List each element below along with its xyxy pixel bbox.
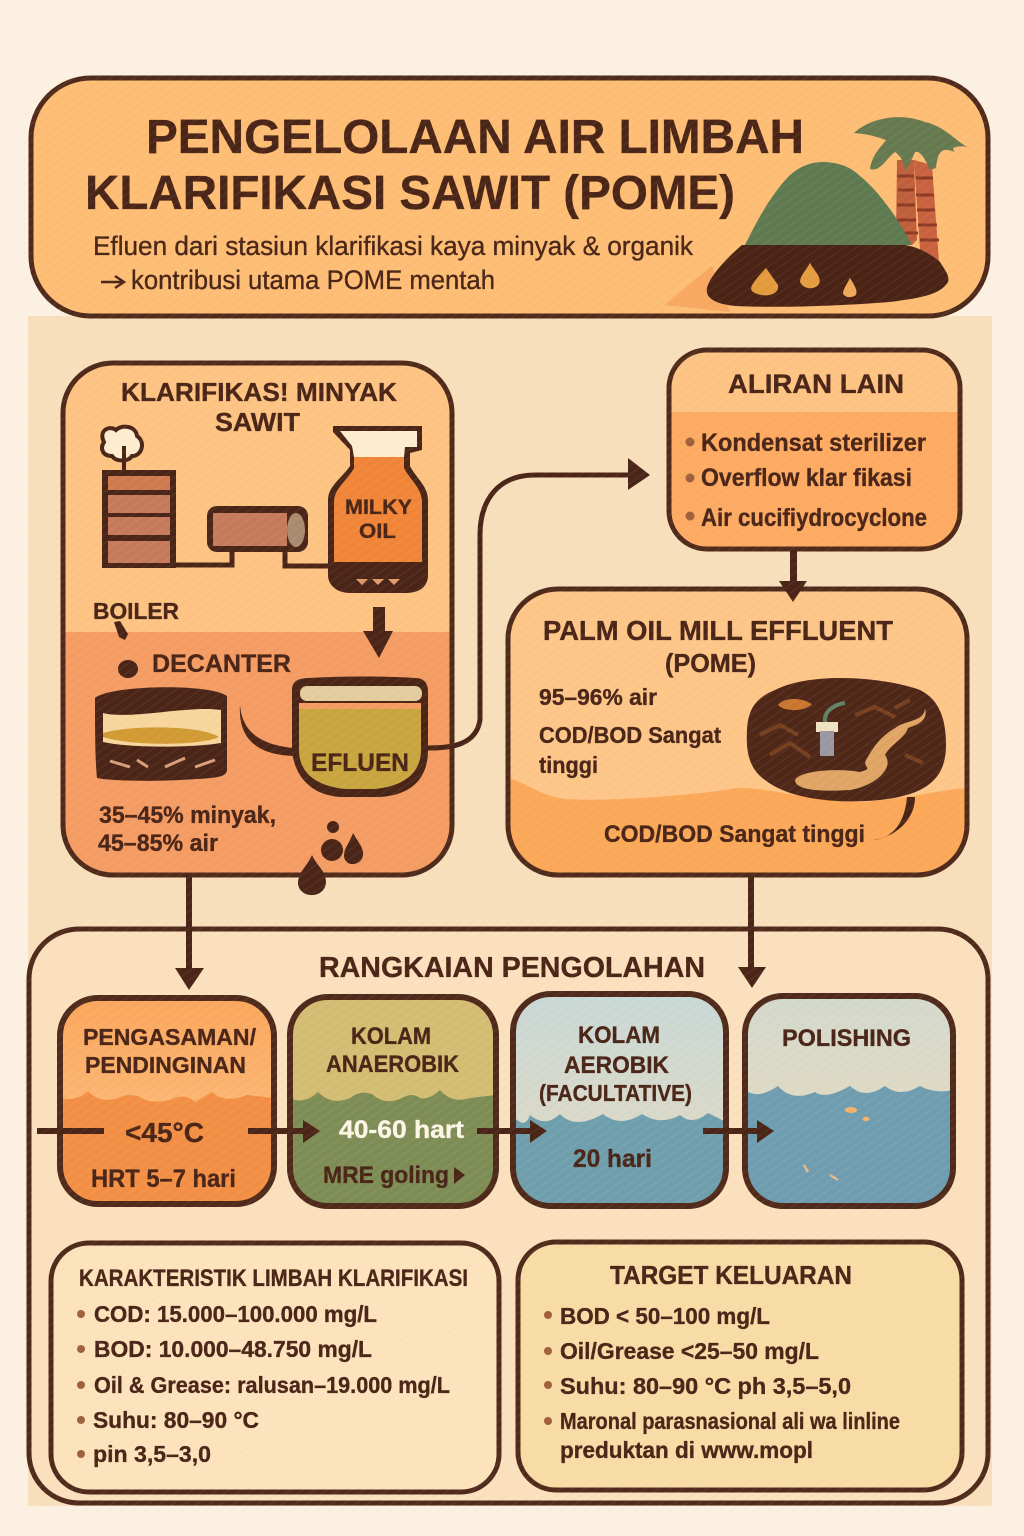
list: karakteristik: Suhu: 80–90 °C <box>93 1407 259 1433</box>
panel: header <box>31 78 988 316</box>
panel: rangkaian pengolahan <box>29 929 988 1503</box>
stage: pengasaman pendinginan <box>60 998 274 1204</box>
text: decanter composition: 35–45% minyak, <box>99 802 276 829</box>
arrow: pome to pengolahan <box>738 875 766 988</box>
text: pome properties: COD/BOD Sangat <box>539 722 721 748</box>
list: target keluaran: BOD < 50–100 mg/L <box>560 1303 770 1329</box>
heading: aliran lain: ALIRAN LAIN <box>728 369 904 399</box>
arrow: aliran lain to pome <box>779 549 807 602</box>
stage: pengasaman pendinginan: HRT 5–7 hari <box>91 1165 236 1193</box>
subtitle: kontribusi utama POME mentah <box>131 265 495 295</box>
label: boiler: BOILER <box>93 598 179 624</box>
title <box>85 111 804 220</box>
stage: pengasaman pendinginan: PENDINGINAN <box>85 1052 246 1078</box>
stage: kolam aerobik <box>513 994 726 1206</box>
text: pome properties: tinggi <box>539 752 598 778</box>
icon: pome sludge pond <box>747 678 946 840</box>
icon: boiler with pipes <box>102 427 330 568</box>
subtitle <box>93 231 693 295</box>
stage: pengasaman pendinginan: PENGASAMAN/ <box>83 1024 257 1050</box>
list: karakteristik: COD: 15.000–100.000 mg/L <box>94 1301 377 1327</box>
heading: karakteristik: KARAKTERISTIK LIMBAH KLARIFIKASI <box>79 1265 468 1292</box>
stage: kolam aerobik: KOLAM <box>578 1022 660 1049</box>
heading: pome <box>543 615 893 678</box>
heading: klarifikasi: KLARIFIKAS! MINYAK <box>121 377 397 407</box>
icon: efluen tank <box>292 676 428 797</box>
icon: milky oil bottle <box>328 426 428 593</box>
stage: kolam aerobik: 20 hari <box>573 1145 652 1173</box>
stage: kolam anaerobik: MRE goling <box>323 1162 449 1189</box>
panel: palm oil mill effluent <box>508 589 967 875</box>
list: aliran lain: Overflow klar fikasi <box>701 464 912 492</box>
stage: kolam aerobik: (FACULTATIVE) <box>539 1080 692 1106</box>
text: decanter composition: 45–85% air <box>98 830 218 857</box>
list: aliran lain <box>686 429 927 532</box>
stage: kolam anaerobik: KOLAM <box>351 1023 431 1050</box>
heading: target keluaran: TARGET KELUARAN <box>610 1260 852 1290</box>
heading: pome: PALM OIL MILL EFFLUENT <box>543 615 893 646</box>
icon: milky oil bottle: MILKY <box>345 496 412 519</box>
icon: oil droplets <box>298 821 363 895</box>
arrow: klarifikasi to pengolahan <box>175 875 204 990</box>
arrow: bottle to efluen <box>363 607 393 658</box>
list: target keluaran: Oil/Grease <25–50 mg/L <box>560 1338 819 1364</box>
icon: cylinder decanter <box>207 506 308 552</box>
title: PENGELOLAAN AIR LIMBAH <box>146 111 804 164</box>
panel: karakteristik limbah klarifikasi <box>51 1243 499 1492</box>
heading: rangkaian pengolahan: RANGKAIAN PENGOLAHAN <box>319 952 705 984</box>
stage: kolam anaerobik: ANAEROBIK <box>326 1051 460 1078</box>
heading: klarifikasi: SAWIT <box>215 407 300 437</box>
icon: palm trees, green mound and soil <box>664 117 968 312</box>
stage: pengasaman pendinginan: <45°C <box>125 1117 204 1148</box>
list: karakteristik: pin 3,5–3,0 <box>93 1441 211 1467</box>
title: KLARIFIKASI SAWIT (POME) <box>85 167 735 220</box>
arrow: stage three to four <box>703 1120 774 1143</box>
arrow: stage one to two <box>248 1120 320 1143</box>
text: decanter composition <box>98 802 276 857</box>
heading: klarifikasi <box>121 377 397 437</box>
panel: aliran lain <box>669 350 960 549</box>
stage: kolam aerobik: AEROBIK <box>564 1052 670 1079</box>
arrow: stage two to three <box>477 1120 547 1143</box>
text: pome properties: 95–96% air <box>539 684 657 710</box>
icon: efluen tank: EFLUEN <box>311 749 409 777</box>
stage: polishing: POLISHING <box>782 1025 911 1052</box>
icon: overflow spout <box>240 705 295 756</box>
arrow: inflow <box>37 1128 104 1134</box>
list: karakteristik: Oil & Grease: ralusan–19.000 mg/L <box>94 1372 450 1398</box>
panel: klarifikasi minyak sawit <box>63 363 452 895</box>
icon: milky oil bottle: OIL <box>359 520 396 543</box>
list: aliran lain: Kondensat sterilizer <box>701 429 926 457</box>
list: karakteristik <box>77 1301 450 1467</box>
icon: decanter drum <box>95 687 227 781</box>
stage: kolam anaerobik <box>290 997 496 1206</box>
label: boiler <box>93 598 179 678</box>
list: karakteristik: BOD: 10.000–48.750 mg/L <box>94 1336 372 1362</box>
arrow head: to aliran lain <box>628 458 650 490</box>
text: pome properties <box>539 684 721 778</box>
list: target keluaran: Suhu: 80–90 °C ph 3,5–5,0 <box>560 1373 851 1399</box>
stage: kolam anaerobik: 40-60 hart <box>339 1116 465 1144</box>
panel: target keluaran <box>518 1242 962 1490</box>
arrow: efluen to aliran lain <box>428 475 630 748</box>
list: aliran lain: Air cucifiydrocyclone <box>701 504 927 532</box>
list: target keluaran: Maronal parasnasional ali wa linline <box>560 1408 900 1434</box>
label: decanter: DECANTER <box>152 650 291 678</box>
heading: pome: (POME) <box>665 648 756 678</box>
list: target keluaran: preduktan di www.mopl <box>560 1437 813 1463</box>
stage: polishing <box>745 996 953 1206</box>
text: pome cod/bod: COD/BOD Sangat tinggi <box>604 821 865 848</box>
subtitle: Efluen dari stasiun klarifikasi kaya minyak & organik <box>93 231 693 261</box>
list: target keluaran <box>544 1303 900 1463</box>
